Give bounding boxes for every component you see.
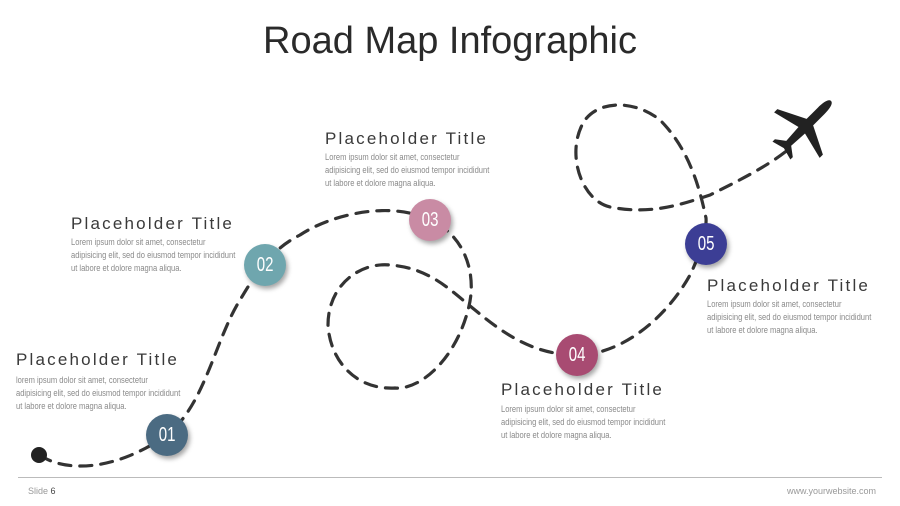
- text block 4: Lorem ipsum dolor sit amet, consectetur: [501, 404, 635, 414]
- step 03: [409, 199, 451, 241]
- text block 3: Placeholder Title: [325, 129, 488, 148]
- step 01: 01: [159, 424, 175, 446]
- text block 5: ut labore et dolore magna aliqua.: [707, 325, 818, 335]
- text block 4: Placeholder Title: [501, 380, 664, 399]
- step 05: [685, 223, 727, 265]
- icon: airplane: [772, 100, 832, 160]
- text block 2: Lorem ipsum dolor sit amet, consectetur: [71, 237, 205, 247]
- step 05: 05: [698, 233, 714, 255]
- text block 5: [707, 276, 872, 335]
- text block 2: adipisicing elit, sed do eiusmod tempor incididunt: [71, 250, 235, 260]
- text block 2: [71, 214, 236, 273]
- text block 1: Placeholder Title: [16, 350, 179, 369]
- step 02: [244, 244, 286, 286]
- step 03: 03: [422, 209, 438, 231]
- text block 3: Lorem ipsum dolor sit amet, consectetur: [325, 152, 459, 162]
- footer: website: www.yourwebsite.com: [787, 486, 876, 496]
- text block 3: [325, 129, 490, 188]
- step 01: [146, 414, 188, 456]
- text block 1: lorem ipsum dolor sit amet, consectetur: [16, 375, 148, 385]
- text block 3: ut labore et dolore magna aliqua.: [325, 178, 436, 188]
- text block 1: ut labore et dolore magna aliqua.: [16, 401, 127, 411]
- title: Road Map Infographic: [263, 20, 637, 62]
- step 04: 04: [569, 344, 585, 366]
- text block 3: adipisicing elit, sed do eiusmod tempor incididunt: [325, 165, 489, 175]
- text block 5: Placeholder Title: [707, 276, 870, 295]
- start dot: [31, 447, 47, 463]
- text block 4: adipisicing elit, sed do eiusmod tempor incididunt: [501, 417, 665, 427]
- text block 4: [501, 380, 666, 440]
- step 02: 02: [257, 254, 273, 276]
- text block 1: adipisicing elit, sed do eiusmod tempor incididunt: [16, 388, 180, 398]
- text block 5: adipisicing elit, sed do eiusmod tempor incididunt: [707, 312, 871, 322]
- text block 1: [16, 350, 180, 411]
- text block 2: ut labore et dolore magna aliqua.: [71, 263, 182, 273]
- step 04: [556, 334, 598, 376]
- text block 5: Lorem ipsum dolor sit amet, consectetur: [707, 299, 841, 309]
- text block 2: Placeholder Title: [71, 214, 234, 233]
- text block 4: ut labore et dolore magna aliqua.: [501, 430, 612, 440]
- footer: slide number: Slide 6: [28, 486, 56, 496]
